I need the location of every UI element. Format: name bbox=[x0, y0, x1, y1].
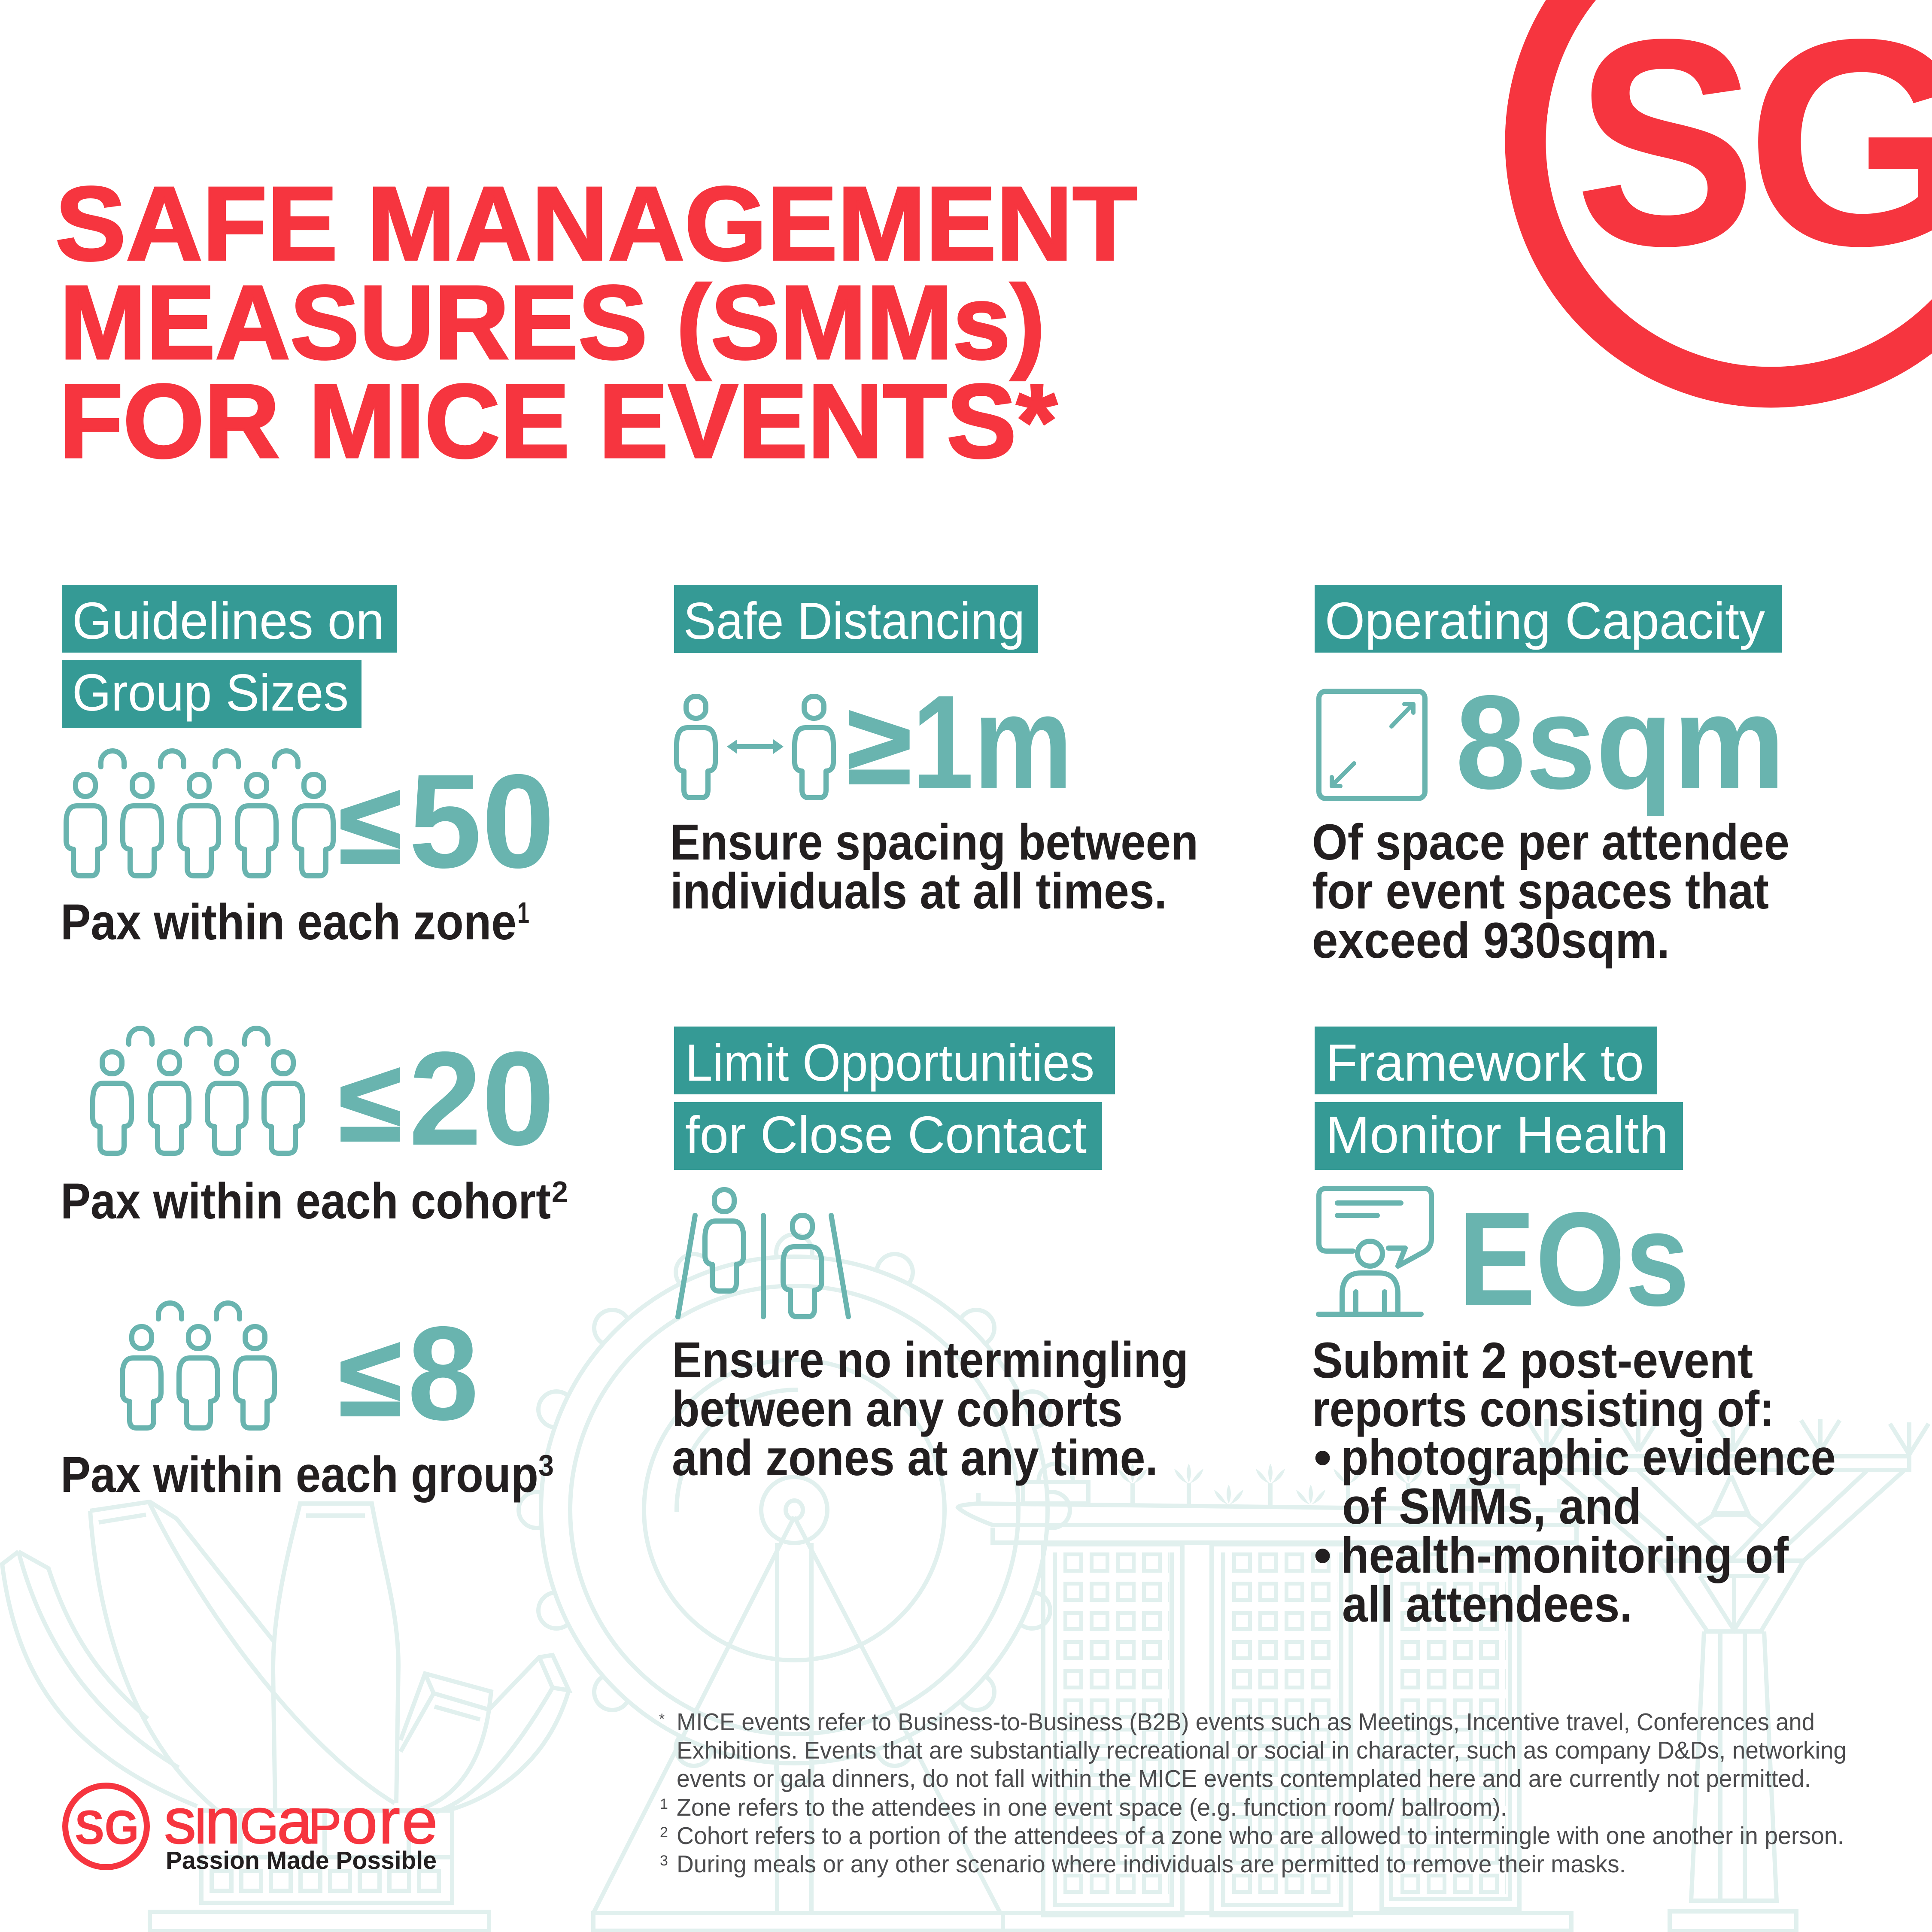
heading: guidelines on group sizes: Guidelines on bbox=[72, 592, 384, 650]
icon: two people separated by barriers bbox=[678, 1190, 848, 1317]
text: post-event reports: health-monitoring of bbox=[1341, 1527, 1789, 1584]
heading: limit opportunities for close contact: for Close Contact bbox=[685, 1106, 1087, 1164]
footnotes: events or gala dinners, do not fall within the MICE events contemplated here and are currently not permitted. bbox=[677, 1765, 1811, 1792]
text: no intermingling: Ensure no intermingling bbox=[672, 1332, 1188, 1388]
panel: safe distancing bbox=[670, 585, 1198, 920]
text: pax within each group: 3 bbox=[538, 1449, 554, 1482]
logo: Singapore Passion Made Possible: SG bbox=[75, 1801, 139, 1854]
footnotes: 2 bbox=[660, 1824, 668, 1841]
stat: at most 50 bbox=[339, 746, 555, 896]
footnotes: During meals or any other scenario where individuals are permitted to remove their masks. bbox=[677, 1850, 1626, 1878]
text: pax within each group: Pax within each group bbox=[61, 1446, 538, 1503]
landmark: Singapore Flyer bbox=[519, 1234, 1070, 1931]
logo: Singapore Passion Made Possible: s bbox=[164, 1785, 196, 1857]
landmark: Supertree bbox=[1003, 1419, 1929, 1931]
footnotes: MICE events refer to Business-to-Business (B2B) events such as Meetings, Incentive travel, Conferences and bbox=[677, 1708, 1815, 1736]
stat: at most 50: 50 bbox=[409, 746, 555, 896]
text: pax within each cohort: 2 bbox=[552, 1175, 568, 1209]
title: FOR MICE EVENTS* bbox=[59, 362, 1057, 480]
title bbox=[55, 165, 1137, 480]
text: ensure spacing: individuals at all times. bbox=[670, 863, 1167, 920]
icon: five people bbox=[66, 751, 333, 876]
text: ensure spacing bbox=[670, 814, 1198, 920]
heading: guidelines on group sizes: Group Sizes bbox=[72, 663, 349, 722]
heading: framework to monitor health: Framework to bbox=[1326, 1033, 1644, 1092]
heading: framework to monitor health bbox=[1315, 1027, 1683, 1170]
logo: Singapore Passion Made Possible: a bbox=[277, 1785, 313, 1857]
panel: operating capacity bbox=[1312, 585, 1789, 969]
footnotes: Zone refers to the attendees in one event space (e.g. function room/ ballroom). bbox=[677, 1794, 1507, 1821]
stat: at least 1 metre: ≥ bbox=[848, 681, 911, 807]
title: MEASURES (SMMs) bbox=[60, 264, 1045, 381]
footnotes: 3 bbox=[660, 1853, 668, 1869]
text: post-event reports bbox=[1312, 1332, 1836, 1633]
heading: guidelines on group sizes bbox=[62, 585, 397, 728]
text: post-event reports: • bbox=[1314, 1429, 1331, 1486]
panel: framework to monitor health bbox=[1312, 1027, 1836, 1633]
logo: Singapore Passion Made Possible: r bbox=[379, 1785, 400, 1857]
stat: EOs: EOs bbox=[1458, 1184, 1689, 1334]
heading: framework to monitor health: Monitor Health bbox=[1326, 1106, 1668, 1164]
stat: 8 square metres: 8sqm bbox=[1455, 667, 1785, 817]
heading: limit opportunities for close contact: Limit Opportunities bbox=[685, 1033, 1094, 1092]
stat: at least 1 metre: 1m bbox=[912, 667, 1072, 817]
logo: Singapore Passion Made Possible: o bbox=[342, 1785, 377, 1857]
panel: limit opportunities for close contact bbox=[672, 1027, 1188, 1486]
landmark: Marina Bay Sands bbox=[958, 1464, 1577, 1915]
footnotes: 1 bbox=[660, 1796, 668, 1812]
logo: Singapore Passion Made Possible: Passion Made Possible bbox=[166, 1847, 437, 1874]
text: post-event reports: photographic evidence bbox=[1341, 1429, 1836, 1486]
footnotes: Exhibitions. Events that are substantially recreational or social in character, such as company D&Ds, networking bbox=[677, 1737, 1847, 1764]
logo: Singapore Passion Made Possible: e bbox=[402, 1785, 437, 1857]
text: space per attendee: for event spaces that bbox=[1312, 863, 1769, 920]
text: pax within each zone: 1 bbox=[517, 896, 529, 930]
icon: three people bbox=[122, 1303, 274, 1428]
text: space per attendee: exceed 930sqm. bbox=[1312, 912, 1670, 969]
stat: at most 20: ≤ bbox=[339, 1039, 401, 1164]
background: Singapore skyline line art bbox=[2, 1234, 1929, 1931]
text: post-event reports: reports consisting of: bbox=[1312, 1381, 1774, 1437]
icon: four people bbox=[93, 1028, 303, 1153]
logo: Singapore Passion Made Possible bbox=[65, 1785, 437, 1874]
landmark: ArtScience Museum bbox=[2, 1502, 569, 1931]
footnotes: * bbox=[659, 1711, 665, 1727]
icon: two people with distance arrow bbox=[677, 696, 833, 798]
text: post-event reports: • bbox=[1314, 1527, 1331, 1584]
title: SAFE MANAGEMENT bbox=[55, 165, 1137, 282]
text: ensure spacing: Ensure spacing between bbox=[670, 814, 1198, 871]
large SG logo, top right bbox=[1525, 0, 1932, 387]
text: post-event reports: Submit 2 post-event bbox=[1312, 1332, 1753, 1389]
stat: at least 1 metre bbox=[848, 667, 1072, 817]
logo: Singapore Passion Made Possible: P bbox=[308, 1798, 341, 1854]
text: post-event reports: of SMMs, and bbox=[1342, 1478, 1641, 1535]
stat: at most 20: 20 bbox=[409, 1024, 555, 1173]
stat: at most 50: ≤ bbox=[339, 761, 401, 887]
icon: square with diagonal arrows bbox=[1319, 691, 1425, 799]
footnotes bbox=[659, 1708, 1847, 1878]
text: no intermingling bbox=[672, 1332, 1188, 1486]
footnotes: Cohort refers to a portion of the attendees of a zone who are allowed to intermingle with one another in person. bbox=[677, 1822, 1844, 1850]
logo: Singapore Passion Made Possible: n bbox=[205, 1785, 240, 1857]
stat: at most 8: 8 bbox=[407, 1298, 479, 1448]
text: pax within each cohort: Pax within each cohort bbox=[61, 1173, 551, 1230]
stat: at most 8 bbox=[339, 1298, 479, 1448]
stat: at most 8: ≤ bbox=[339, 1313, 401, 1439]
text: no intermingling: and zones at any time. bbox=[672, 1430, 1158, 1486]
stat: at most 20 bbox=[339, 1024, 555, 1173]
heading: safe distancing: Safe Distancing bbox=[683, 592, 1025, 650]
Marina Bay Sands windows bbox=[1063, 1552, 1506, 1894]
logo: Singapore Passion Made Possible: I bbox=[194, 1798, 207, 1854]
panel: guidelines on group sizes bbox=[61, 585, 568, 1503]
icon: presenter with speech bubble bbox=[1318, 1188, 1431, 1314]
text: post-event reports: all attendees. bbox=[1342, 1576, 1632, 1633]
text: space per attendee bbox=[1312, 814, 1789, 969]
heading: limit opportunities for close contact bbox=[674, 1027, 1115, 1170]
text: space per attendee: Of space per attendee bbox=[1312, 814, 1789, 871]
text: pax within each zone: Pax within each zone bbox=[61, 894, 516, 951]
text: no intermingling: between any cohorts bbox=[672, 1381, 1123, 1437]
logo: Singapore Passion Made Possible: G bbox=[240, 1798, 279, 1854]
heading: operating capacity: Operating Capacity bbox=[1325, 592, 1765, 650]
